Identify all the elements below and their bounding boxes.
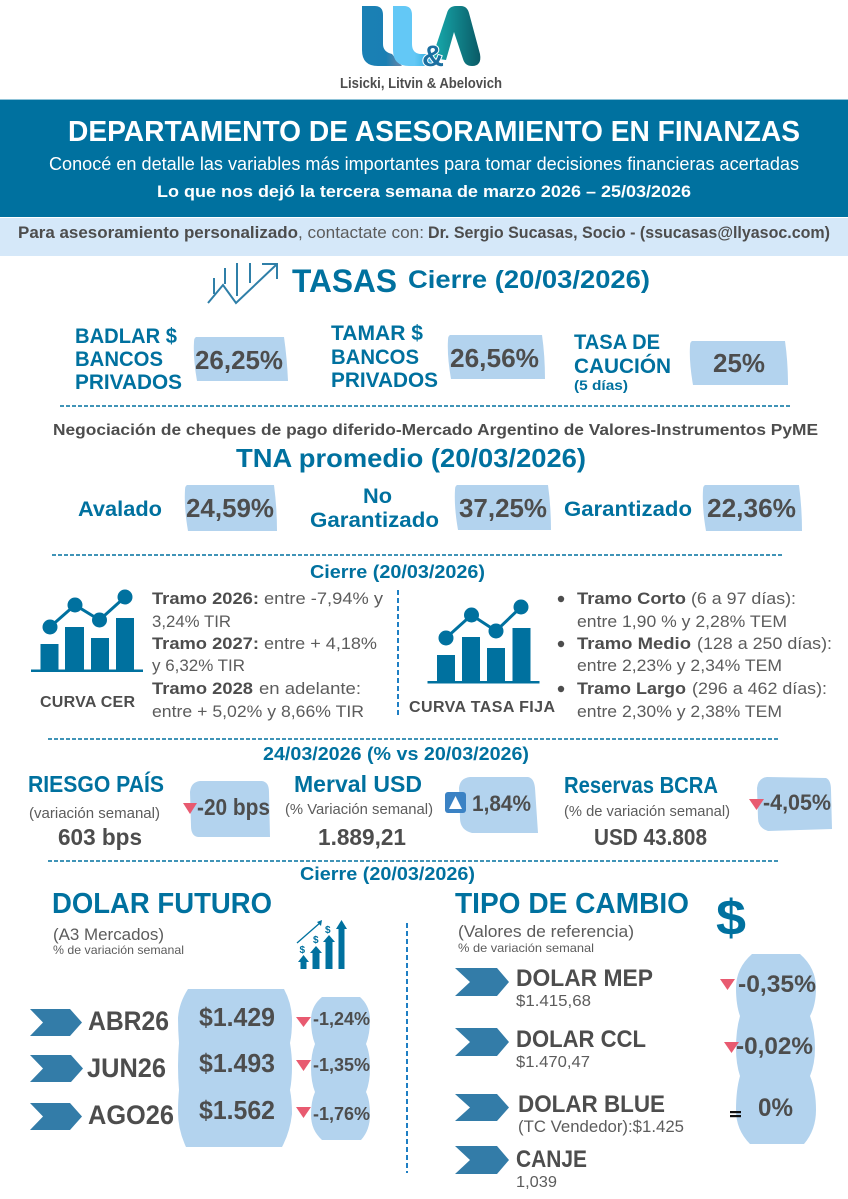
heading: tipo de cambio: TIPO DE CAMBIO bbox=[455, 888, 689, 920]
row: dolar ccl bbox=[455, 1026, 813, 1071]
row: dolar mep bbox=[455, 965, 816, 1010]
text block: tramos cer: y 6,32% TIR bbox=[152, 656, 245, 675]
panel: badlar: 26,25% bbox=[195, 345, 283, 375]
text block: tramos tasa fija: (6 a 97 días): bbox=[691, 589, 796, 608]
text block: tramos tasa fija: entre 2,30% y 2,38% TEM bbox=[577, 702, 782, 721]
panel: merval usd bbox=[285, 771, 538, 850]
panel: merval usd: (% Variación semanal) bbox=[285, 801, 433, 818]
heading: tipo de cambio bbox=[455, 888, 689, 955]
panel: tamar: BANCOS bbox=[331, 346, 419, 369]
text block: tramos tasa fija: entre 2,23% y 2,34% TEM bbox=[577, 656, 782, 675]
text block: tramos tasa fija bbox=[558, 589, 832, 721]
icon: rising dollar arrows: $ bbox=[300, 945, 306, 956]
panel: tasa de caucion: 25% bbox=[713, 348, 765, 378]
row: dolar blue: (TC Vendedor):$1.425 bbox=[518, 1118, 684, 1136]
row: dolar blue bbox=[455, 1091, 793, 1136]
icon: curva tasa fija chart bbox=[428, 600, 540, 684]
panel: badlar: PRIVADOS bbox=[75, 371, 182, 394]
heading: dolar futuro bbox=[52, 888, 272, 957]
date line: Lo que nos dejó la tercera semana de marzo 2026 – 25/03/2026 bbox=[157, 182, 691, 201]
label: curva tasa fija: CURVA TASA FIJA bbox=[409, 699, 555, 716]
panel: riesgo pais: RIESGO PAÍS bbox=[28, 770, 164, 797]
panel: tamar bbox=[331, 322, 545, 392]
panel: tamar: PRIVADOS bbox=[331, 369, 438, 392]
panel: tasa de caucion bbox=[574, 331, 788, 393]
row: ago26: $1.562 bbox=[199, 1095, 275, 1125]
row: ago26: -1,76% bbox=[313, 1104, 370, 1124]
heading: dolar futuro: (A3 Mercados) bbox=[53, 925, 164, 944]
icon: rising chart arrow bbox=[208, 263, 277, 303]
panel: avalado: 24,59% bbox=[186, 493, 274, 523]
panel: tasa de caucion: TASA DE bbox=[574, 331, 660, 354]
row: dolar mep: $1.415,68 bbox=[516, 993, 591, 1010]
panel: header band bbox=[0, 99, 848, 217]
panel: garantizado bbox=[564, 485, 802, 531]
heading: tasas: Cierre (20/03/2026) bbox=[408, 266, 650, 294]
heading: cierre dolar: Cierre (20/03/2026) bbox=[300, 864, 475, 884]
heading: dolar futuro: DOLAR FUTURO bbox=[52, 888, 272, 920]
icon: rising dollar arrows bbox=[297, 920, 347, 969]
row: jun26 bbox=[30, 1048, 370, 1083]
text block: tramos tasa fija: (128 a 250 días): bbox=[697, 634, 832, 653]
panel: tamar: 26,56% bbox=[450, 343, 539, 373]
heading: tipo de cambio: (Valores de referencia) bbox=[458, 922, 634, 941]
row: dolar ccl: DOLAR CCL bbox=[516, 1026, 646, 1053]
icon: rising dollar arrows: $ bbox=[325, 925, 331, 936]
row: dolar ccl: $1.470,47 bbox=[516, 1054, 590, 1071]
heading: fecha variacion: 24/03/2026 (% vs 20/03/2026) bbox=[263, 744, 529, 764]
row: canje: CANJE bbox=[516, 1146, 587, 1173]
heading: tasas bbox=[292, 263, 650, 299]
row: abr26 bbox=[30, 1002, 370, 1036]
text block: tramos cer: en adelante: bbox=[259, 679, 361, 698]
panel: reservas bcra: Reservas BCRA bbox=[564, 772, 718, 798]
panel: merval usd: 1.889,21 bbox=[318, 824, 406, 850]
panel: merval usd: Merval USD bbox=[294, 771, 422, 797]
row: canje: 1,039 bbox=[516, 1174, 557, 1191]
text block: tramos cer: entre -7,94% y bbox=[264, 589, 384, 608]
panel: tamar: TAMAR $ bbox=[331, 322, 423, 345]
panel: contact band bbox=[0, 218, 848, 256]
panel: reservas bcra: -4,05% bbox=[763, 790, 831, 815]
panel: riesgo pais: 603 bps bbox=[58, 824, 142, 850]
row: jun26: -1,35% bbox=[313, 1055, 370, 1075]
logo: Lisicki, Litvin & Abelovich: Lisicki, Litvin & Abelovich bbox=[340, 75, 502, 92]
panel: riesgo pais bbox=[28, 770, 270, 850]
row: dolar mep: DOLAR MEP bbox=[516, 965, 653, 992]
panel: no garantizado: No bbox=[363, 485, 392, 508]
panel: no garantizado bbox=[310, 485, 551, 532]
panel: no garantizado: 37,25% bbox=[459, 493, 547, 523]
heading: tasas: TASAS bbox=[292, 263, 397, 299]
panel: riesgo pais: (variación semanal) bbox=[29, 805, 160, 822]
row: dolar mep: -0,35% bbox=[738, 971, 816, 998]
text block: tramos tasa fija: Tramo Largo bbox=[577, 679, 686, 698]
text block: tramos cer: entre + 5,02% y 8,66% TIR bbox=[152, 702, 364, 721]
panel: badlar bbox=[75, 325, 288, 394]
heading: dolar futuro: % de variación semanal bbox=[53, 943, 184, 957]
row: abr26: -1,24% bbox=[313, 1009, 370, 1029]
panel: dolar futuro blobs bbox=[178, 989, 370, 1147]
logo: Lisicki, Litvin & Abelovich bbox=[340, 6, 502, 92]
text block: tramos cer: entre + 4,18% bbox=[264, 634, 377, 653]
icon: rising dollar arrows: $ bbox=[313, 935, 319, 946]
panel: garantizado: 22,36% bbox=[707, 493, 796, 523]
row: abr26: ABR26 bbox=[88, 1006, 169, 1036]
panel: riesgo pais: -20 bps bbox=[197, 794, 270, 820]
row: dolar blue: DOLAR BLUE bbox=[518, 1091, 665, 1118]
panel: avalado: Avalado bbox=[78, 498, 162, 521]
row: ago26: AGO26 bbox=[88, 1100, 174, 1130]
row: jun26: JUN26 bbox=[87, 1053, 166, 1083]
heading: tna promedio: TNA promedio (20/03/2026) bbox=[236, 443, 586, 473]
logo: Lisicki, Litvin & Abelovich: & bbox=[422, 40, 444, 73]
title: DEPARTAMENTO DE ASESORAMIENTO EN FINANZAS bbox=[68, 116, 800, 148]
text block: tramos cer: Tramo 2028 bbox=[152, 679, 253, 698]
text block: tramos tasa fija: Tramo Medio bbox=[577, 634, 691, 653]
row: ago26 bbox=[30, 1095, 370, 1130]
heading: cierre curvas: Cierre (20/03/2026) bbox=[310, 562, 485, 582]
row: dolar ccl: -0,02% bbox=[736, 1033, 813, 1060]
text block: tramos tasa fija: Tramo Corto bbox=[577, 589, 686, 608]
row: jun26: $1.493 bbox=[199, 1048, 275, 1078]
panel: merval usd: 1,84% bbox=[472, 791, 531, 816]
panel: garantizado: Garantizado bbox=[564, 498, 692, 521]
panel: contact band: Para asesoramiento personalizado bbox=[18, 224, 298, 242]
panel: avalado bbox=[78, 485, 277, 531]
text block: tramos cer: Tramo 2027: bbox=[152, 634, 259, 653]
subtitle: Conocé en detalle las variables más importantes para tomar decisiones financieras acertadas bbox=[49, 154, 799, 174]
text block: tramos cer: Tramo 2026: bbox=[152, 589, 259, 608]
icon: curva cer chart bbox=[31, 590, 143, 672]
panel: contact band: Dr. Sergio Sucasas, Socio - (ssucasas@llyasoc.com) bbox=[428, 224, 830, 242]
text block: tramos cer bbox=[152, 589, 384, 721]
text block: tramos tasa fija: (296 a 462 días): bbox=[692, 679, 827, 698]
panel: badlar: BANCOS bbox=[75, 348, 163, 371]
panel: tasa de caucion: CAUCIÓN bbox=[574, 354, 671, 378]
panel: tasa de caucion: (5 días) bbox=[574, 377, 628, 393]
icon: dollar sign: $ bbox=[716, 890, 746, 946]
row: canje bbox=[455, 1146, 587, 1191]
heading: tipo de cambio: % de variación semanal bbox=[458, 941, 594, 955]
text block: tramos tasa fija: entre 1,90 % y 2,28% TEM bbox=[577, 612, 787, 631]
panel: tipo de cambio blobs bbox=[736, 954, 816, 1144]
heading: negociacion de cheques: Negociación de cheques de pago diferido-Mercado Argentino de Valores-Instrumentos PyME bbox=[53, 422, 818, 439]
panel: no garantizado: Garantizado bbox=[310, 509, 439, 532]
row: dolar blue: 0% bbox=[758, 1094, 793, 1122]
text block: tramos cer: 3,24% TIR bbox=[152, 612, 231, 631]
panel: contact band: , contactate con: bbox=[298, 224, 424, 242]
label: curva cer: CURVA CER bbox=[40, 694, 135, 711]
panel: reservas bcra: USD 43.808 bbox=[594, 824, 707, 850]
panel: badlar: BADLAR $ bbox=[75, 325, 177, 348]
panel: reservas bcra: (% de variación semanal) bbox=[564, 803, 730, 820]
row: abr26: $1.429 bbox=[199, 1002, 275, 1032]
panel: reservas bcra bbox=[564, 772, 832, 850]
